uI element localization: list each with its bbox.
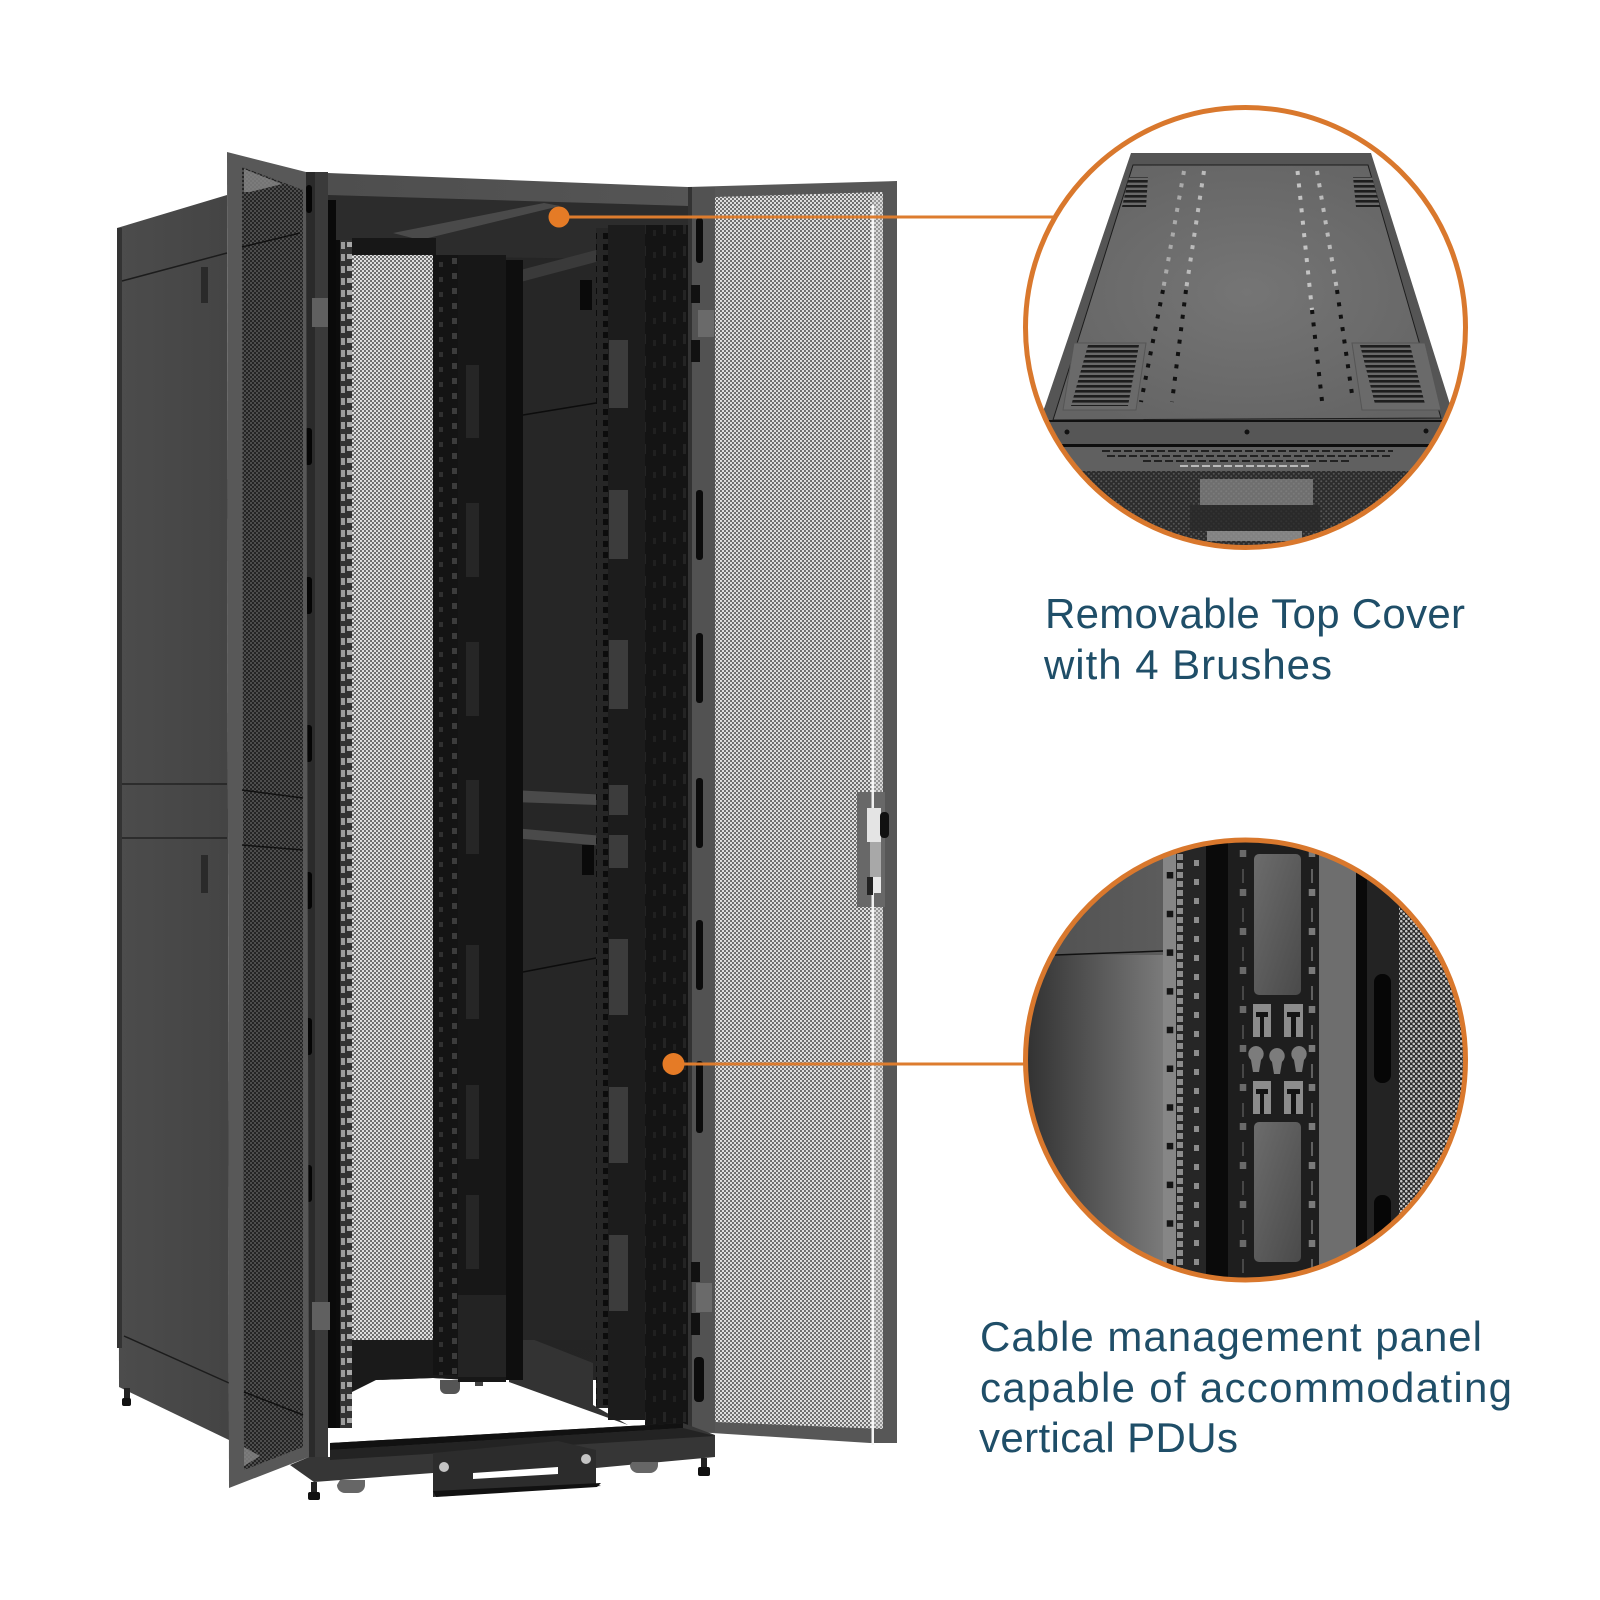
- rear mesh panel: [352, 255, 433, 1340]
- front left rail: [328, 200, 352, 1428]
- door mesh: [1399, 906, 1463, 1214]
- detail circle: cable management panel: [1023, 836, 1471, 1284]
- door mesh below: [1082, 471, 1409, 545]
- top header: [328, 173, 688, 206]
- cabinet roof: [1044, 153, 1450, 420]
- grey column: [1319, 836, 1356, 1284]
- base frame: [290, 1423, 715, 1482]
- front band: [1048, 420, 1442, 447]
- door handle: [857, 792, 889, 907]
- PDU mounting panel: [1228, 836, 1319, 1284]
- front kick plate: [433, 1441, 601, 1497]
- brush: rear left: [1122, 177, 1148, 207]
- caption: top cover: [1043, 590, 1465, 688]
- black gap: [1206, 836, 1228, 1284]
- vented strip: [1064, 447, 1427, 471]
- caption: cable management panel: [979, 1313, 1512, 1461]
- door post: [1356, 872, 1399, 1248]
- rear casters: [440, 1380, 483, 1394]
- roof plate: [1053, 165, 1441, 420]
- rear lower bar: [352, 1340, 506, 1392]
- brush plate: front right: [1352, 343, 1441, 410]
- caption: top cover: Removable Top Cover: [1045, 590, 1465, 637]
- detail circle: removable top cover: [1020, 108, 1470, 561]
- caption: cable management panel: vertical PDUs: [979, 1414, 1238, 1461]
- side panel: [117, 195, 229, 1440]
- brush: rear right: [1353, 177, 1380, 207]
- callout line: cable panel: [662, 1053, 1026, 1075]
- rear interior: [328, 195, 688, 1425]
- rack cabinet: [117, 152, 897, 1500]
- cabinet wall: [1028, 858, 1163, 1262]
- left rail and column: [433, 255, 506, 1382]
- marker dot: top cover: [548, 206, 570, 228]
- front rail: [1163, 836, 1176, 1284]
- caption: top cover: with 4 Brushes: [1043, 641, 1332, 688]
- perforated rail: [1176, 836, 1206, 1284]
- right door hinge post: [688, 187, 715, 1432]
- hole columns: [1141, 171, 1353, 402]
- marker dot: cable panel: [662, 1053, 684, 1075]
- callout line: top cover: [548, 206, 1054, 228]
- keyholes: [1248, 1046, 1307, 1074]
- ring: [1026, 840, 1466, 1280]
- brush plate: front left: [1063, 343, 1146, 410]
- base feet and casters: [308, 1458, 710, 1500]
- floor opening: [333, 1378, 683, 1445]
- ring: [1026, 108, 1466, 548]
- caption: cable management panel: Cable management panel: [980, 1313, 1482, 1360]
- caption: cable management panel: capable of accommodating: [980, 1364, 1512, 1411]
- right door open: [688, 181, 897, 1445]
- left door open: [227, 152, 309, 1488]
- front left post: [305, 172, 330, 1457]
- right rail and panels: [580, 225, 688, 1425]
- cable tie slots: [1253, 1004, 1303, 1114]
